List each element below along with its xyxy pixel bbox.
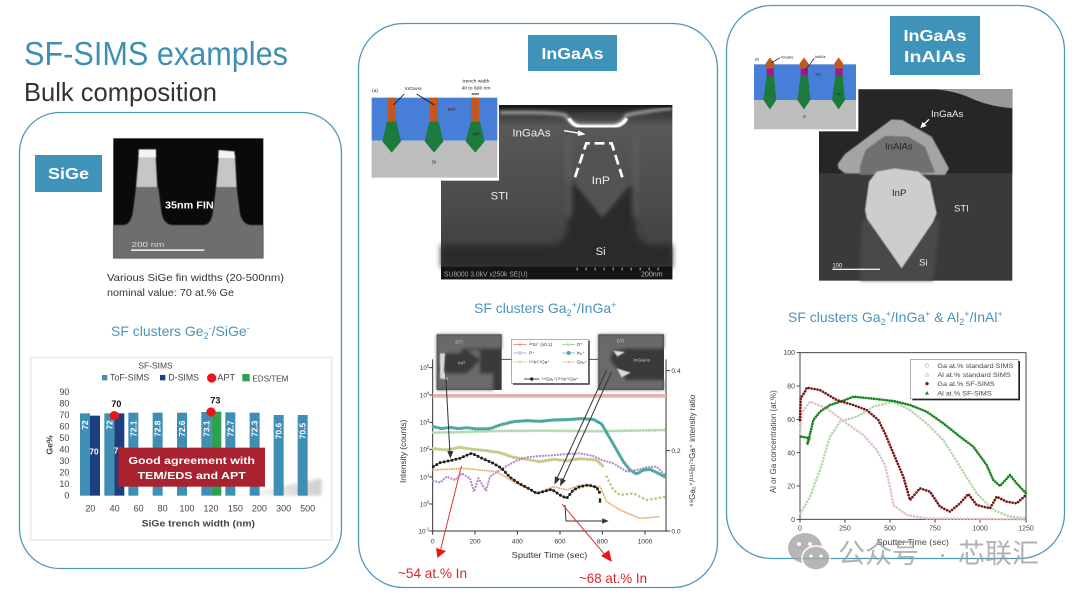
micrograph: InGaAs fin cross-section: InGaAs (512, 127, 551, 139)
watermark: WeChat icon and account name: 公众号 (838, 539, 919, 569)
line chart: intensity vs sputter time: 1 (427, 473, 430, 478)
micrograph: 35nm FIN (113, 138, 263, 258)
micrograph: InAlAs fin cross-section: InP (892, 188, 906, 198)
micrograph: 35nm FIN: 200 nm (132, 240, 164, 249)
line chart: intensity vs sputter time: 10 (420, 447, 427, 454)
bar chart: Ge percent vs trench width: 72 (114, 446, 123, 456)
bar chart: Ge percent vs trench width: 150 (228, 504, 243, 514)
heading: SF clusters InGaAs: + (572, 300, 577, 310)
black pointer arrows (446, 370, 612, 523)
line chart: intensity vs sputter time: 1000 (638, 538, 653, 545)
line chart: intensity vs sputter time: ²⁸Si⁺ (x0.1) (529, 342, 553, 347)
subtitle: Bulk composition (24, 77, 217, 107)
line chart: intensity vs sputter time: ⁶⁹Ga₂⁺/¹¹⁵In⁷¹Ga⁺ (542, 376, 579, 381)
heading: SF clusters InGaAs InAlAs: + (964, 309, 969, 319)
bar chart: Ge percent vs trench width: 200 (252, 504, 267, 514)
micrograph: InAlAs fin cross-section: 100 (832, 263, 843, 270)
line chart: Al or Ga concentration vs sputter time: 500 (884, 526, 896, 533)
schematic: InGaAs trench structures: InGaAs (405, 86, 422, 92)
line chart: intensity vs sputter time: ¹¹⁵In⁷¹Ga⁺ (529, 359, 550, 364)
bar chart: Ge percent vs trench width: 80 (59, 399, 69, 409)
schematic: InGaAs/InAlAs structures: STI (815, 73, 821, 77)
heading: SF clusters InGaAs InAlAs: + (997, 309, 1003, 319)
bar chart: Ge percent vs trench width: SF-SIMS (138, 361, 173, 371)
schematic: InGaAs/InAlAs structures: InAlAs (815, 55, 826, 59)
micrograph: InAlAs fin cross-section: STI (954, 203, 969, 213)
schematic: InGaAs/InAlAs structures: (b) (755, 58, 759, 62)
line chart: Al or Ga concentration vs sputter time: 60 (787, 417, 795, 424)
watermark: WeChat icon and account name (788, 533, 1039, 570)
caption: fin widths: nominal value: 70 at.% Ge (107, 287, 234, 299)
badge: InGaAs InAlAs (890, 16, 980, 75)
badge: InGaAs InAlAs: InAlAs (904, 49, 966, 66)
bar chart: Ge percent vs trench width: 72 (104, 420, 114, 430)
heading: SF clusters InGaAs InAlAs: + (925, 309, 930, 319)
line chart: intensity vs sputter time: STI (455, 340, 463, 346)
micrograph: InGaAs fin cross-section: 200nm (641, 271, 663, 278)
schematic: InGaAs/InAlAs structures (752, 53, 858, 131)
heading: SF clusters SiGe: - (209, 323, 212, 333)
line chart: Al or Ga concentration vs sputter time: Al at.% SF-SIMS (937, 390, 992, 397)
line chart: intensity vs sputter time: InP (458, 360, 466, 366)
bar chart: Ge percent vs trench width: 73 (210, 396, 220, 406)
line chart: intensity vs sputter time: 5 (427, 363, 430, 368)
line chart: intensity vs sputter time: 400 (512, 538, 523, 545)
badge: InGaAs InAlAs: InGaAs (904, 28, 967, 45)
panel: InGaAs (358, 24, 718, 588)
schematic: InGaAs trench structures: 40 to 600 nm (461, 85, 491, 91)
bar chart: Ge percent vs trench width: 70.6 (274, 423, 284, 439)
micrograph: InGaAs fin cross-section: STI (491, 191, 508, 203)
line chart: Al or Ga concentration vs sputter time: 80 (787, 384, 795, 391)
heading: SF clusters SiGe: SF clusters Ge (111, 323, 204, 339)
line chart: Al or Ga concentration vs sputter time (769, 350, 1034, 547)
bar chart: Ge percent vs trench width: 10 (59, 479, 69, 489)
bar chart: Ge percent vs trench width: 72.3 (250, 420, 260, 437)
line chart: Al or Ga concentration vs sputter time: 1000 (972, 526, 988, 533)
bar chart: Ge percent vs trench width: APT (217, 373, 236, 383)
schematic: InGaAs trench structures: (a) (372, 88, 378, 94)
bar chart: Ge percent vs trench width: 100 (179, 504, 194, 514)
line chart: intensity vs sputter time: In₂⁺ (577, 350, 585, 355)
line chart: intensity vs sputter time: 3 (427, 418, 430, 423)
line chart: intensity vs sputter time: 0 (427, 500, 430, 505)
line chart: intensity vs sputter time: InGaAs (633, 358, 650, 364)
bar chart: Ge percent vs trench width: 72 (80, 420, 90, 430)
bar chart: Ge percent vs trench width: 0 (64, 490, 69, 500)
bar chart: Ge percent vs trench width: 40 (110, 504, 120, 514)
heading: SF clusters InGaAs: 2 (567, 308, 572, 318)
caption: fin widths: Various SiGe fin widths (20-500nm) (107, 272, 284, 284)
line chart: Al or Ga concentration vs sputter time: 0 (798, 526, 802, 533)
annotation: 54 at.% In: ~54 at.% In (398, 565, 467, 581)
badge: InGaAs: InGaAs (542, 46, 604, 63)
micrograph: InGaAs fin cross-section: SU8000 3.0kV x250k SE(U) (444, 271, 528, 278)
panel: InGaAs InAlAs (726, 6, 1064, 558)
line chart: intensity vs sputter time: P⁺ (529, 350, 535, 355)
bar chart: Ge percent vs trench width: ToF-SIMS (110, 373, 149, 383)
schematic: InGaAs/InAlAs structures: InP (836, 93, 842, 97)
line chart: intensity vs sputter time: -1 (425, 527, 430, 532)
bar chart: Ge percent vs trench width (31, 357, 332, 540)
heading: SF clusters InGaAs InAlAs: /InGa (891, 309, 925, 325)
line chart: intensity vs sputter time: 10 (420, 474, 427, 481)
line chart: Al or Ga concentration vs sputter time: 100 (783, 350, 795, 357)
bar chart: Ge percent vs trench width: 90 (59, 387, 69, 397)
watermark: WeChat icon and account name: 芯联汇 (958, 539, 1039, 569)
line chart: Al or Ga concentration vs sputter time: 750 (929, 526, 941, 533)
bar chart: Ge percent vs trench width: TEM/EDS and APT (137, 471, 247, 482)
line chart: intensity vs sputter time: 800 (597, 538, 608, 545)
bar chart: Ge percent vs trench width: 70 (59, 410, 69, 420)
bar chart: Ge percent vs trench width: Ge% (44, 435, 54, 455)
heading: SF clusters InGaAs: /InGa (577, 300, 611, 316)
watermark: WeChat icon and account name: · (938, 539, 947, 569)
line chart: intensity vs sputter time: 4 (427, 391, 430, 396)
heading: SF clusters InGaAs InAlAs: + (886, 309, 891, 319)
bar chart: Ge percent vs trench width: 60 (134, 504, 144, 514)
schematic: InGaAs trench structures: Si (432, 160, 436, 166)
line chart: intensity vs sputter time: 0.2 (671, 448, 681, 455)
line chart: intensity vs sputter time: 0.0 (671, 528, 681, 535)
heading: SF clusters InGaAs InAlAs: SF clusters Ga (788, 309, 881, 325)
bar chart: Ge percent vs trench width: 72.8 (153, 420, 163, 437)
bar chart: Ge percent vs trench width: 30 (59, 456, 69, 466)
bar chart: Ge percent vs trench width: 72.7 (225, 420, 235, 437)
line chart: intensity vs sputter time: 10 (418, 528, 425, 535)
bar chart: Ge percent vs trench width: 120 (203, 504, 218, 514)
bar chart: Ge percent vs trench width: D-SIMS (168, 373, 199, 383)
bar chart: Ge percent vs trench width: 72.1 (128, 420, 138, 437)
heading: SF clusters InGaAs: + (611, 300, 616, 310)
micrograph: InAlAs fin cross-section: InAlAs (885, 142, 913, 152)
line chart: intensity vs sputter time: 10 (420, 392, 427, 399)
micrograph: InGaAs fin cross-section (441, 105, 672, 279)
bar chart: Ge percent vs trench width: 70 (89, 447, 99, 457)
bar chart: Ge percent vs trench width: EDS/TEM (252, 373, 288, 383)
panel: SiGe (20, 112, 342, 568)
line chart: intensity vs sputter time: O⁺ (577, 342, 583, 347)
heading: SF clusters InGaAs InAlAs: 2 (881, 317, 886, 327)
heading: SF clusters SiGe: 2 (204, 331, 209, 341)
badge: InGaAs (528, 35, 617, 71)
bar chart: Ge percent vs trench width: 20 (59, 467, 69, 477)
line chart: intensity vs sputter time: Ga₂⁺ (577, 359, 588, 364)
heading: SF clusters InGaAs InAlAs: 2 (959, 317, 964, 327)
bar chart: Ge percent vs trench width: 70 (111, 399, 121, 409)
line chart: intensity vs sputter time: 0 (431, 538, 435, 545)
heading: SF clusters SiGe: - (247, 323, 250, 333)
line chart: intensity vs sputter time: 10 (420, 501, 427, 508)
bar chart: Ge percent vs trench width: 20 (85, 504, 95, 514)
line chart: intensity vs sputter time: 10 (420, 365, 427, 372)
schematic: InGaAs/InAlAs structures: InGaAs (781, 55, 793, 59)
micrograph: InGaAs fin cross-section: Si (596, 246, 606, 258)
bar chart: Ge percent vs trench width: Good agreement with (128, 456, 255, 467)
line chart: intensity vs sputter time: 200 (469, 538, 481, 545)
bar chart: Ge percent vs trench width: 500 (300, 504, 315, 514)
micrograph: InAlAs fin cross-section: InGaAs (931, 109, 964, 119)
caption: fin widths (107, 272, 284, 299)
micrograph: InAlAs fin cross-section (819, 89, 1012, 281)
line chart: Al or Ga concentration vs sputter time: Al or Ga concentration (at.%) (769, 390, 778, 493)
schematic: InGaAs trench structures: STI (448, 107, 456, 113)
bar chart: Ge percent vs trench width: SiGe trench width (nm) (142, 519, 255, 529)
line chart: Al or Ga concentration vs sputter time: 0 (791, 517, 795, 524)
line chart: intensity vs sputter time: 10 (420, 420, 427, 427)
line chart: Al or Ga concentration vs sputter time: 1250 (1018, 526, 1034, 533)
bar chart: Ge percent vs trench width: 80 (158, 504, 168, 514)
heading: SF clusters InGaAs: SF clusters Ga (474, 300, 567, 316)
schematic: InGaAs/InAlAs structures: Si (803, 115, 806, 119)
schematic: InGaAs trench structures: trench width (463, 79, 490, 85)
schematic: InGaAs trench structures: InP (472, 132, 480, 138)
title: SF-SIMS examples (24, 35, 288, 72)
line chart: intensity vs sputter time: ⁶⁹Ga₂⁺/¹¹⁵In⁷¹Ga⁺ intensity ratio (688, 394, 697, 507)
line chart: Al or Ga concentration vs sputter time: Al at.% standard SIMS (937, 372, 1011, 379)
badge: SiGe: SiGe (48, 166, 89, 183)
line chart: intensity vs sputter time: STI (617, 338, 624, 344)
annotation: 68 at.% In: ~68 at.% In (579, 570, 647, 586)
line chart: Al or Ga concentration vs sputter time: 250 (839, 526, 851, 533)
badge: SiGe (35, 155, 102, 192)
schematic: InGaAs trench structures (369, 77, 499, 181)
line chart: Al or Ga concentration vs sputter time: 20 (787, 484, 795, 491)
bar chart: Ge percent vs trench width: 60 (59, 422, 69, 432)
line chart: Al or Ga concentration vs sputter time: Ga at.% SF-SIMS (937, 381, 995, 388)
line chart: intensity vs sputter time: Intensity (counts) (398, 419, 408, 483)
line chart: intensity vs sputter time: 0.4 (671, 368, 681, 375)
line chart: intensity vs sputter time: 600 (554, 538, 566, 545)
bar chart: Ge percent vs trench width: 40 (59, 445, 69, 455)
line chart: intensity vs sputter time: Sputter Time (sec) (512, 550, 588, 560)
bar chart: Ge percent vs trench width: 70.5 (298, 423, 308, 439)
heading: SF clusters InGaAs InAlAs: & Al (930, 309, 959, 325)
bar chart: Ge percent vs trench width: 300 (276, 504, 291, 514)
line chart: Al or Ga concentration vs sputter time: 40 (787, 450, 795, 457)
micrograph: InAlAs fin cross-section: Si (919, 258, 928, 268)
line chart: intensity vs sputter time: 2 (427, 445, 430, 450)
red arrow: second region (562, 504, 612, 562)
heading: SF clusters SiGe: /SiGe (212, 323, 247, 339)
micrograph: 35nm FIN: 35nm FIN (165, 201, 214, 212)
red arrow: first region (436, 466, 462, 558)
heading: SF clusters InGaAs InAlAs: /InAl (969, 309, 997, 325)
micrograph: InGaAs fin cross-section: InP (592, 175, 610, 187)
bar chart: Ge percent vs trench width: 73.1 (201, 420, 211, 437)
line chart: intensity vs sputter time (398, 334, 697, 560)
line chart: Al or Ga concentration vs sputter time: Ga at.% standard SIMS (937, 363, 1014, 370)
bar chart: Ge percent vs trench width: 72.6 (177, 420, 187, 437)
line chart: Al or Ga concentration vs sputter time: Sputter Time (sec) (877, 538, 949, 547)
bar chart: Ge percent vs trench width: 50 (59, 433, 69, 443)
